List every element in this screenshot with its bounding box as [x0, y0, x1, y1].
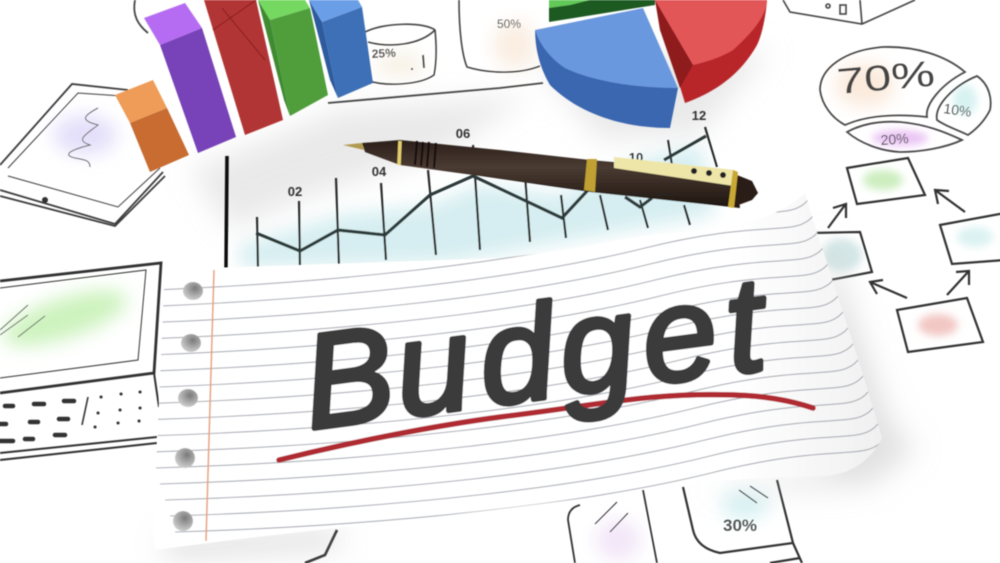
icon: cylinder 25%	[365, 24, 436, 84]
axis labels: 04	[372, 164, 387, 179]
icon: percent ring chart	[820, 47, 991, 152]
bar chart 3D	[115, 0, 373, 172]
tablet left	[568, 490, 657, 563]
punched holes	[173, 282, 203, 531]
pen cap end	[728, 170, 758, 208]
green bar	[258, 0, 328, 116]
arrows	[828, 190, 969, 298]
flow diagram	[812, 158, 1000, 352]
icon: percent ring chart: 20%	[880, 130, 909, 148]
pen gold band	[584, 159, 597, 192]
right box	[940, 213, 1000, 264]
icon: bottom sketches	[305, 480, 802, 563]
blue bar	[309, 0, 373, 98]
pen grip rings	[415, 141, 436, 168]
notebook paper	[100, 193, 883, 550]
icon: percent ring chart: 70%	[835, 53, 936, 102]
axis labels: 10	[629, 150, 643, 165]
line chart	[226, 108, 717, 268]
axis labels: 02	[288, 184, 302, 199]
top box	[847, 158, 925, 204]
stand line	[305, 530, 337, 563]
icon: top right sketch	[783, 0, 915, 24]
icon: laptop sketch	[0, 263, 161, 460]
left box	[812, 232, 872, 280]
tablet right: 30%	[723, 516, 757, 535]
paper sheet	[153, 193, 882, 550]
green slice	[549, 0, 655, 22]
axis and ticks	[226, 156, 227, 268]
pen	[343, 140, 758, 208]
red underline	[279, 395, 813, 460]
icon: cylinder 25%: 25%	[371, 46, 396, 61]
icon: tablet sketch	[0, 84, 165, 226]
ruled lines	[100, 200, 883, 532]
axis labels	[288, 108, 706, 199]
title: Budget: Budget	[294, 249, 777, 458]
orange bar	[115, 80, 189, 172]
trend line	[256, 136, 706, 251]
red bar	[204, 0, 283, 135]
pie chart 3D	[535, 0, 767, 128]
tablet right	[683, 480, 802, 563]
pen body	[362, 140, 740, 208]
paper shadow	[160, 230, 915, 556]
axis labels: 06	[456, 126, 470, 141]
icon: cylinder 50%	[134, 0, 543, 103]
pen tip	[343, 143, 364, 150]
bottom box	[897, 298, 983, 352]
margin line	[206, 270, 214, 541]
pen gold ring	[399, 141, 400, 165]
blue slice	[535, 8, 678, 128]
bar shadows	[190, 50, 770, 230]
icon: cylinder 50%: 50%	[497, 17, 521, 31]
chart shading	[240, 145, 715, 268]
purple bar	[144, 3, 236, 153]
axis labels: 12	[692, 108, 706, 123]
pen clip	[614, 157, 735, 186]
icon: percent ring chart: 10%	[943, 100, 973, 120]
red slice	[655, 0, 767, 103]
